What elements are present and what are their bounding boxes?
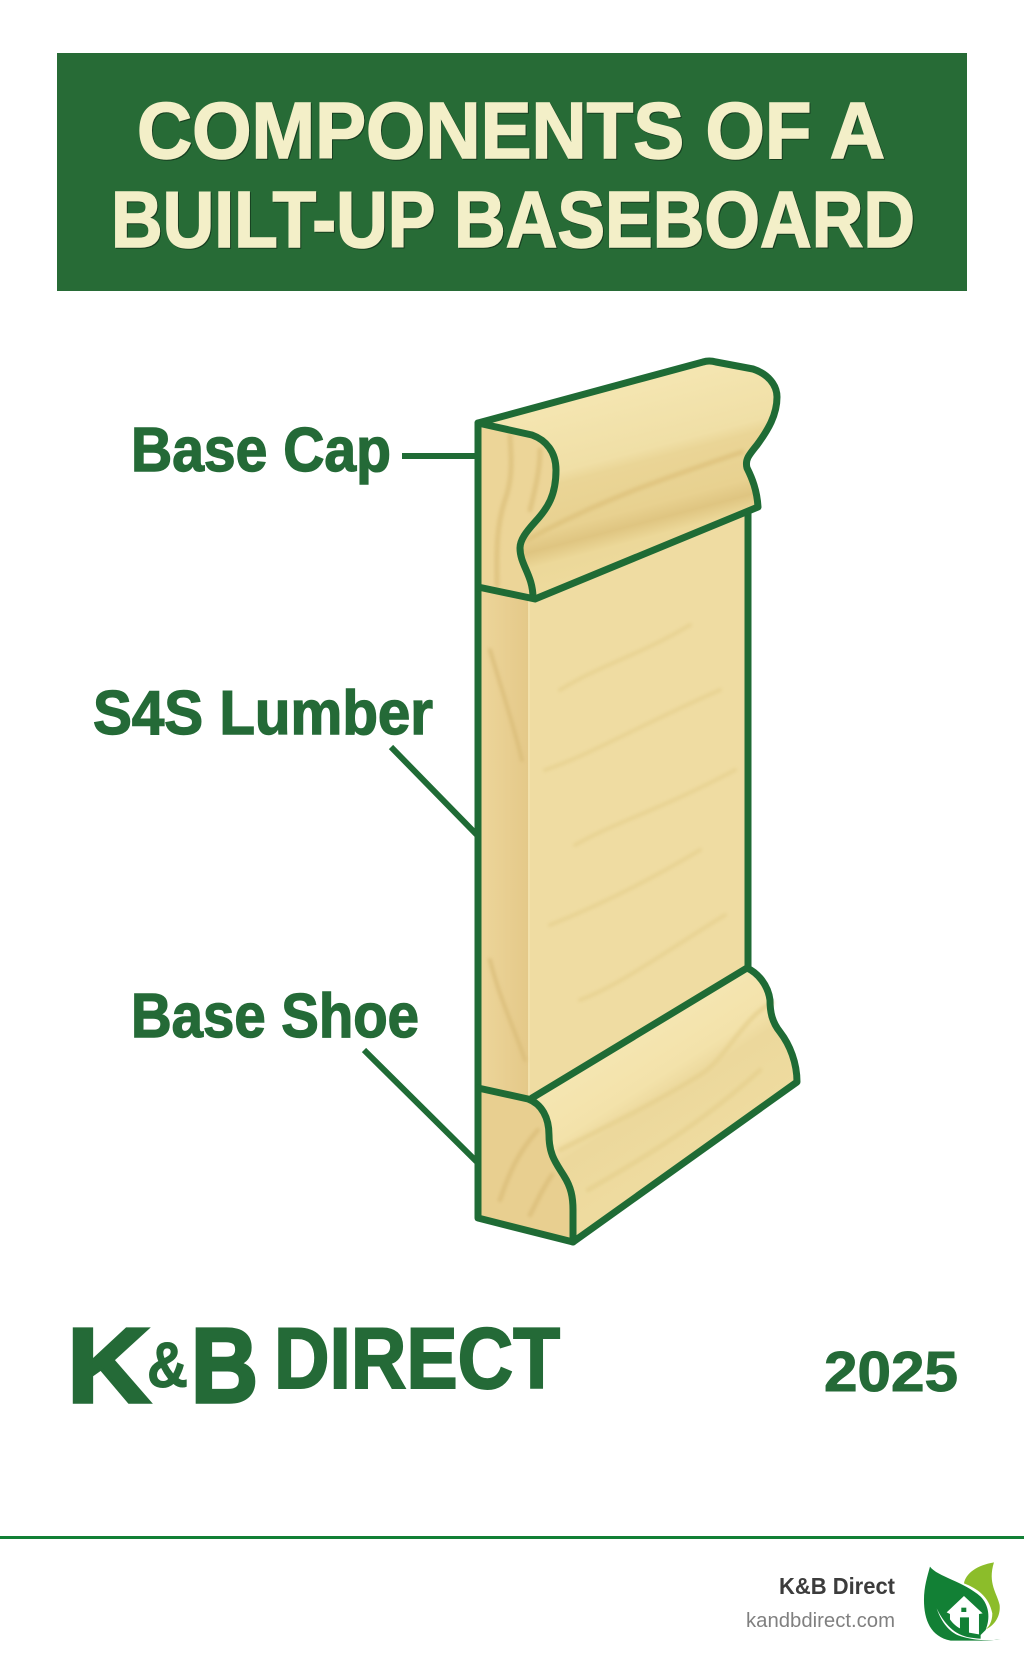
year: 2025	[824, 1340, 958, 1404]
title banner	[57, 53, 967, 291]
footer divider	[0, 1536, 1024, 1539]
footer website: kandbdirect.com	[746, 1610, 895, 1632]
brand wordmark: K&B DIRECT: K	[67, 1307, 150, 1425]
footer icon: leaf and house	[924, 1562, 1001, 1641]
brand wordmark: K&B DIRECT	[67, 1307, 560, 1425]
title line 1: COMPONENTS OF A	[137, 86, 885, 175]
base cap	[478, 361, 777, 599]
leader line: S4S Lumber	[391, 747, 478, 836]
S4S lumber board	[478, 510, 748, 1097]
brand wordmark: K&B DIRECT: &	[147, 1329, 188, 1401]
label: Base Cap: Base Cap	[131, 416, 391, 485]
label: S4S Lumber: S4S Lumber	[93, 679, 433, 748]
brand wordmark: K&B DIRECT: DIRECT	[274, 1311, 560, 1407]
footer brand name: K&B Direct	[779, 1573, 895, 1599]
label: Base Shoe: Base Shoe	[131, 982, 419, 1051]
leader line: Base Shoe	[364, 1050, 478, 1163]
brand wordmark: K&B DIRECT: B	[191, 1307, 258, 1425]
leader line: Base Cap	[402, 453, 478, 459]
base shoe	[478, 968, 797, 1242]
baseboard illustration	[478, 361, 797, 1242]
title line 2: BUILT-UP BASEBOARD	[111, 175, 915, 264]
